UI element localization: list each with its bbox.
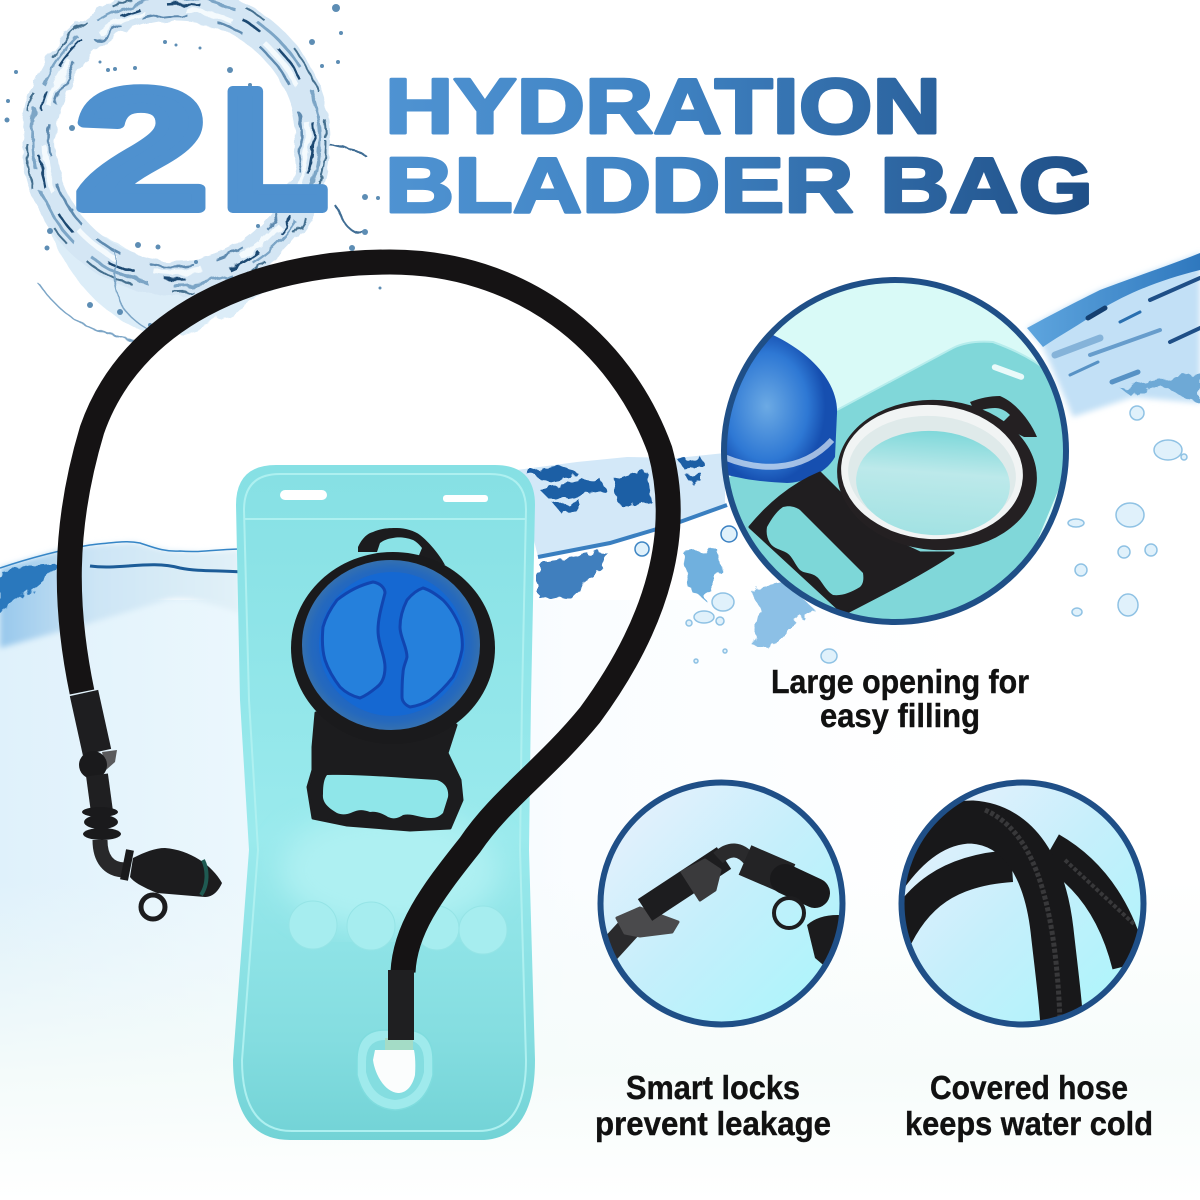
white seal [841,404,1023,540]
caption: smart locks: prevent leakage [595,1105,831,1142]
handle [308,713,462,830]
caption: covered hose: Covered hose [930,1069,1128,1106]
title: 2L: L [221,55,328,245]
caption: smart locks: Smart locks [626,1069,800,1106]
title: 2L [75,55,328,245]
right wave [1027,253,1200,417]
detail circle: covered hose [898,780,1146,1028]
middle wave [517,453,725,557]
caption: covered hose [905,1069,1153,1142]
handle [750,473,953,612]
title: 2L: 2 [75,55,208,245]
splash droplets [4,4,382,327]
bite valve [79,693,222,919]
black ring [837,400,1037,550]
blue lid [720,330,837,483]
detail circle: smart locks [600,782,850,1024]
drinking hose [69,262,668,1040]
caption: large opening [771,663,1029,734]
opening [856,430,1010,536]
hose port [357,1030,433,1110]
background water [0,253,1200,1200]
hanging slots [280,490,488,502]
water droplets right [635,406,1187,663]
caption: covered hose: keeps water cold [905,1105,1153,1142]
water splash ring [26,0,365,340]
loop [358,528,445,565]
caption: large opening: Large opening for [771,663,1029,700]
embossed icons [289,901,507,954]
pouch [725,342,1075,630]
bladder bag [233,465,535,1140]
fill cap [291,528,495,830]
caption: large opening: easy filling [820,697,980,734]
title: bladder bag: BLADDER BAG [385,141,1093,229]
title: hydration: HYDRATION [385,62,941,150]
detail circle: large opening [720,280,1075,630]
caption: smart locks [595,1069,831,1142]
left waterline [0,542,240,648]
